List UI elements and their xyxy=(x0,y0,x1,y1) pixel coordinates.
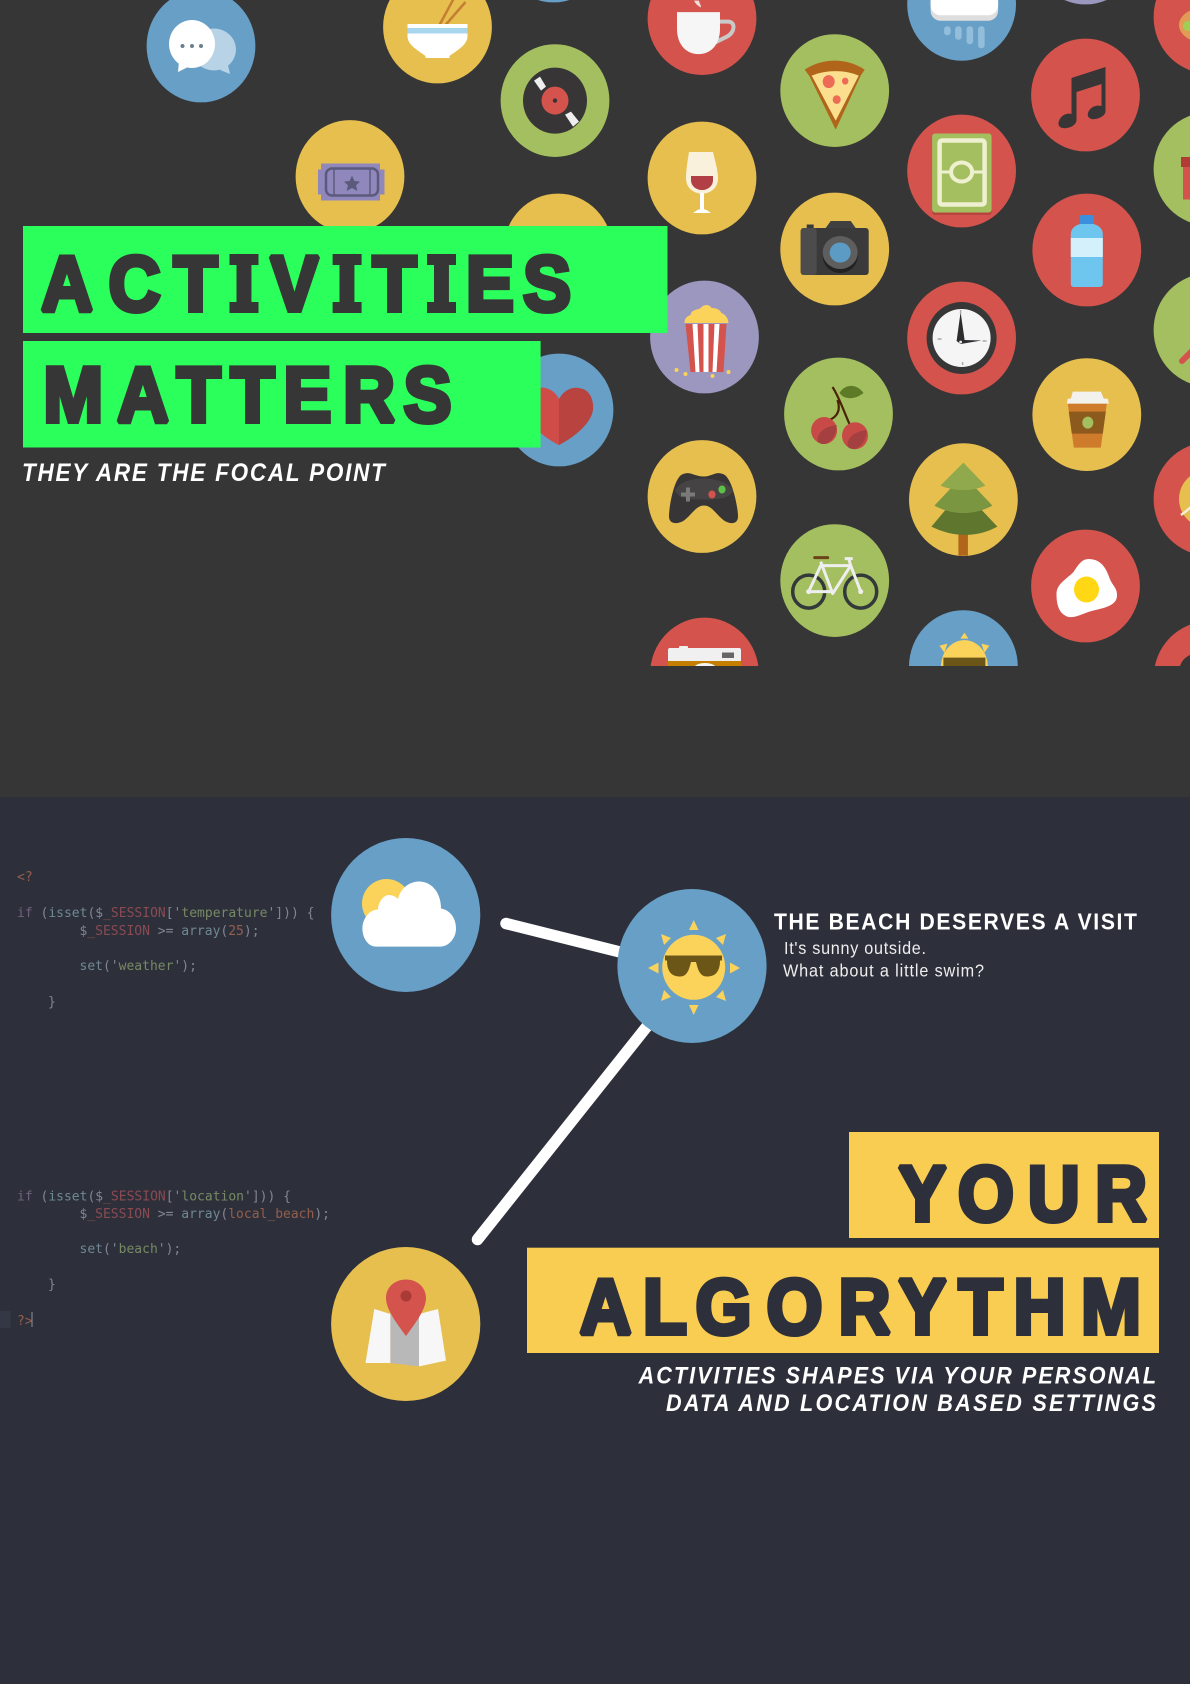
code block: temperature: set('weather'); xyxy=(80,959,197,974)
icon: map pin xyxy=(331,1247,480,1401)
title box: your xyxy=(849,1132,1159,1238)
icon: wine glass xyxy=(648,122,756,234)
icon: heart xyxy=(518,354,614,466)
code block: temperature xyxy=(17,870,314,1010)
icon: blue circle top xyxy=(538,0,569,2)
callout: beach: It's sunny outside. xyxy=(784,938,926,958)
subtitle xyxy=(638,1361,1156,1416)
code block: temperature: <? xyxy=(17,870,33,885)
callout: beach xyxy=(774,908,1137,981)
code block: location: if (isset($_SESSION['location'])) { xyxy=(17,1190,291,1204)
icon: sun behind cloud xyxy=(331,838,480,992)
code block: temperature: if (isset($_SESSION['temperature'])) { xyxy=(17,906,314,921)
icon: sun with sunglasses small xyxy=(909,610,1018,666)
icon: pine tree xyxy=(909,443,1018,556)
callout: beach: What about a little swim? xyxy=(783,961,984,981)
title box: activities: ACTIVITIES xyxy=(41,240,571,327)
code block: temperature: $_SESSION >= array(25); xyxy=(80,924,260,939)
code block: location: } xyxy=(48,1278,56,1292)
subtitle: THEY ARE THE FOCAL POINT xyxy=(22,459,387,487)
icon: clock xyxy=(907,282,1016,394)
icon grid xyxy=(147,0,1190,734)
code block: location: $_SESSION >= array(local_beach); xyxy=(80,1207,330,1222)
code block: location: set('beach'); xyxy=(80,1242,181,1257)
icon: right column partial gift xyxy=(1154,113,1190,225)
code block: location: ?> xyxy=(17,1314,33,1329)
icon: pizza slice xyxy=(780,34,889,147)
subtitle: DATA AND LOCATION BASED SETTINGS xyxy=(666,1389,1156,1416)
title box: matters xyxy=(23,341,541,448)
icon: camera xyxy=(780,193,889,305)
icon: fried egg xyxy=(1031,530,1140,642)
code block: location xyxy=(0,1190,330,1329)
subtitle: ACTIVITIES SHAPES VIA YOUR PERSONAL xyxy=(638,1361,1156,1389)
icon: yellow circle behind title xyxy=(508,194,608,226)
icon: right column partial bottom xyxy=(1154,624,1190,666)
icon: purple circle top xyxy=(1064,0,1106,4)
callout: beach: THE BEACH DESERVES A VISIT xyxy=(774,908,1137,935)
icon: instant camera xyxy=(650,618,758,666)
icon: right column partial stick xyxy=(1154,274,1190,386)
icon: chat bubbles xyxy=(147,0,255,102)
icon: music note xyxy=(1031,39,1140,151)
icon: ticket xyxy=(296,120,404,233)
icon: bicycle xyxy=(780,524,889,637)
icon: right column partial ball xyxy=(1154,443,1190,555)
icon: takeaway cup xyxy=(1032,358,1141,471)
code block: temperature: } xyxy=(48,995,56,1010)
panel: your algorythm xyxy=(0,797,1190,1684)
title box: your: YOUR xyxy=(899,1150,1147,1237)
icon: vinyl record xyxy=(501,44,609,157)
icon: football field xyxy=(907,115,1016,227)
icon: game controller xyxy=(648,440,756,553)
icon: sun with sunglasses xyxy=(617,889,767,1043)
title box: activities xyxy=(23,226,668,333)
icon: noodle bowl xyxy=(383,0,492,83)
icon: cherries xyxy=(784,358,893,470)
panel: activities matters xyxy=(0,0,1190,797)
title box: algorythm: ALGORYTHM xyxy=(580,1263,1141,1350)
icon: popcorn xyxy=(650,281,759,393)
icon: coffee cup xyxy=(648,0,756,75)
title box: matters: MATTERS xyxy=(43,351,451,438)
icon: rain cloud xyxy=(907,0,1016,61)
icon: right column partial soup xyxy=(1154,0,1190,73)
connector lines xyxy=(478,924,660,1240)
icon: water bottle xyxy=(1032,194,1141,306)
